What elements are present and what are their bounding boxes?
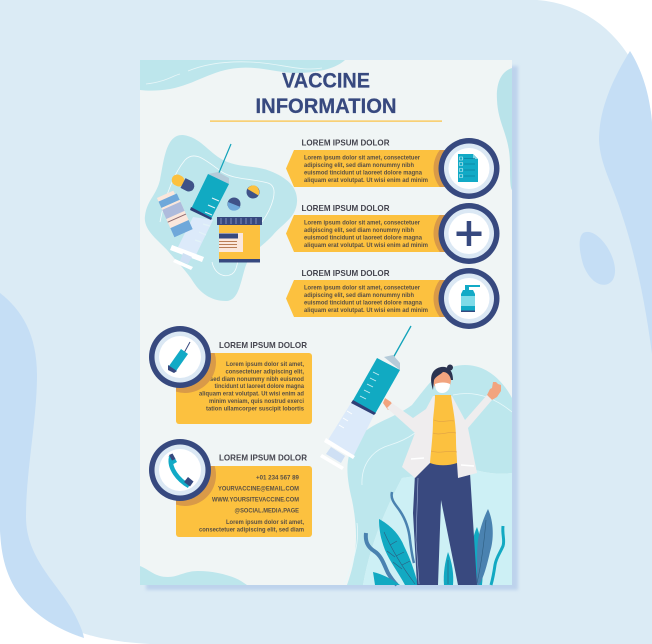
icon: checklist bbox=[438, 138, 500, 199]
heading: LOREM IPSUM DOLOR bbox=[219, 340, 307, 350]
capsule bbox=[170, 173, 196, 193]
coat bbox=[387, 395, 492, 478]
contact text: Lorem ipsum dolor sit amet, bbox=[226, 519, 304, 526]
section 2 bbox=[286, 203, 500, 264]
big syringe bbox=[320, 326, 411, 470]
coat pockets bbox=[411, 458, 474, 466]
arrow banner bbox=[286, 280, 450, 317]
illustration: doctor with syringe bbox=[320, 326, 504, 585]
blob bbox=[145, 135, 297, 301]
icon: syringe bbox=[149, 326, 211, 388]
body text bbox=[304, 154, 428, 184]
body text: Lorem ipsum dolor sit amet, consectetuer bbox=[304, 284, 420, 292]
arrow banner bbox=[286, 215, 450, 252]
body text: tincidunt ut laoreet dolore magna bbox=[214, 383, 304, 390]
body text: tation ullamcorper suscipit lobortis bbox=[206, 406, 304, 412]
body text: adipiscing elit, sed diam nonummy nibh bbox=[304, 227, 414, 234]
shirt bbox=[430, 395, 457, 465]
contact text: @SOCIAL.MEDIA.PAGE bbox=[234, 508, 300, 514]
contact text: +01 234 567 89 bbox=[256, 474, 299, 482]
poster bbox=[140, 60, 512, 585]
decoration: top left wave bbox=[140, 60, 345, 91]
contact text: YOURVACCINE@EMAIL.COM bbox=[218, 486, 299, 492]
contact text: WWW.YOURSITEVACCINE.COM bbox=[212, 496, 299, 504]
plants right bbox=[444, 509, 504, 585]
body text: Lorem ipsum dolor sit amet, consectetuer bbox=[304, 220, 420, 226]
body text: aliquam erat volutpat. Ut wisi enim ad bbox=[199, 390, 304, 398]
body text: aliquam erat volutpat. Ut wisi enim ad minim bbox=[304, 242, 428, 249]
circle shadow bbox=[434, 280, 445, 317]
plants left bbox=[366, 492, 418, 585]
heading: LOREM IPSUM DOLOR bbox=[302, 138, 390, 148]
mask bbox=[435, 382, 450, 393]
body text: adipiscing elit, sed diam nonummy nibh bbox=[304, 162, 414, 169]
illustration: medicine group bbox=[145, 135, 297, 301]
panel bbox=[176, 466, 312, 537]
body text: sed diam nonummy nibh euismod bbox=[210, 376, 304, 383]
body text bbox=[304, 284, 428, 314]
icon: plus bbox=[438, 203, 500, 264]
circle shadow bbox=[176, 466, 216, 506]
card: contact bbox=[149, 439, 312, 537]
icon: phone bbox=[149, 439, 211, 501]
icon: sanitizer bottle bbox=[438, 268, 500, 329]
hands bbox=[383, 398, 393, 410]
title underline bbox=[210, 120, 442, 122]
jar bbox=[217, 217, 262, 262]
section 3 bbox=[286, 268, 500, 329]
hair bbox=[431, 367, 453, 390]
body text bbox=[199, 361, 304, 412]
heading: LOREM IPSUM DOLOR bbox=[219, 452, 307, 462]
decoration: figure background blobs bbox=[344, 365, 512, 585]
pill round bbox=[228, 198, 240, 211]
contact text: consectetuer adipiscing elit, sed diam bbox=[199, 526, 304, 534]
body text: euismod tincidunt ut laoreet dolore magna bbox=[304, 234, 422, 242]
title: VACCINE bbox=[282, 70, 370, 92]
pants bbox=[413, 462, 477, 585]
body text: aliquam erat volutpat. Ut wisi enim ad minim bbox=[304, 307, 428, 314]
face bbox=[433, 369, 451, 391]
section 1 bbox=[286, 138, 500, 199]
vial bbox=[157, 190, 193, 237]
body text: consectetuer adipiscing elit, bbox=[226, 368, 304, 376]
body text: adipiscing elit, sed diam nonummy nibh bbox=[304, 292, 414, 299]
heading: LOREM IPSUM DOLOR bbox=[302, 203, 390, 213]
card: dosage bbox=[149, 326, 312, 424]
body text bbox=[304, 220, 428, 249]
body text: minim veniam, quis nostrud exerci bbox=[209, 398, 304, 405]
poster shadow bbox=[146, 66, 518, 590]
heading: LOREM IPSUM DOLOR bbox=[302, 268, 390, 278]
body text: euismod tincidunt ut laoreet dolore magna bbox=[304, 300, 422, 306]
syringe bbox=[170, 144, 231, 270]
title: INFORMATION bbox=[256, 95, 396, 118]
circle shadow bbox=[176, 353, 216, 393]
shirt creases bbox=[431, 420, 457, 452]
body text: Lorem ipsum dolor sit amet, bbox=[226, 361, 304, 368]
panel bbox=[176, 353, 312, 424]
doctor bbox=[383, 364, 501, 585]
decoration: right blob bbox=[497, 68, 512, 190]
circle shadow bbox=[434, 215, 445, 252]
decoration: bottom left wave bbox=[140, 566, 247, 585]
body text: euismod tincidunt ut laoreet dolore magna bbox=[304, 170, 422, 176]
arrow banner bbox=[286, 150, 450, 187]
title bbox=[256, 70, 396, 118]
body text: Lorem ipsum dolor sit amet, consectetuer bbox=[304, 154, 420, 162]
contact text bbox=[199, 474, 304, 534]
pill half bbox=[246, 185, 260, 198]
circle shadow bbox=[434, 150, 445, 187]
body text: aliquam erat volutpat. Ut wisi enim ad minim bbox=[304, 177, 428, 184]
